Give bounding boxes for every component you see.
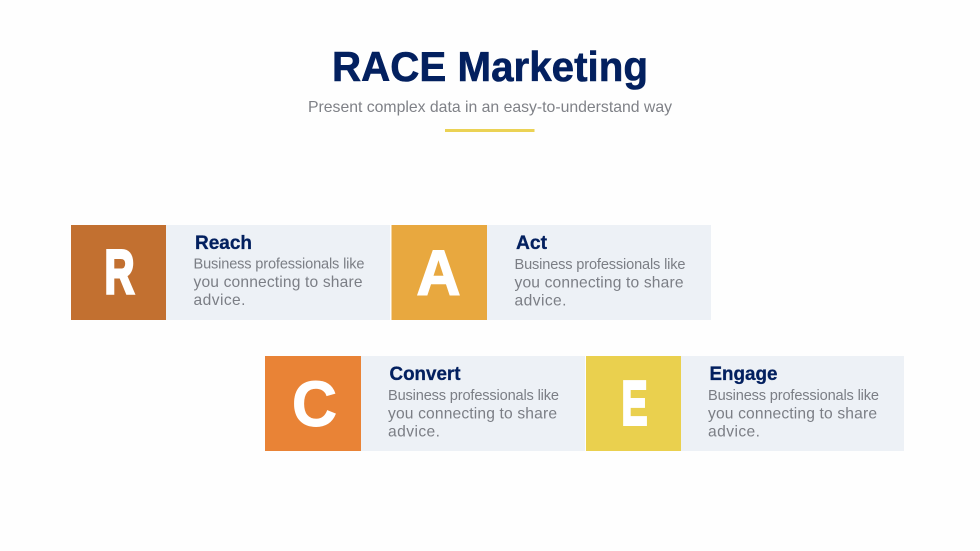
icon: letter R tile: R [104, 238, 134, 308]
text: Engage description: advice. [708, 424, 760, 440]
heading: Engage: Engage [710, 364, 778, 385]
accent underline [445, 129, 534, 132]
icon: letter A tile: A [416, 237, 460, 309]
icon: letter A tile [392, 225, 487, 320]
icon: letter R tile [71, 225, 166, 320]
subtitle: Present complex data in an easy-to-understand way [308, 99, 672, 116]
icon: letter E tile [586, 356, 681, 451]
icon: letter C tile [265, 356, 361, 451]
text: Reach description: Business professionals like [194, 256, 364, 272]
text: Engage description: you connecting to share [708, 406, 877, 422]
text: Convert description: Business professionals like [388, 388, 559, 404]
text: Act description: Business professionals like [514, 257, 686, 273]
text: Reach description: you connecting to share [194, 274, 362, 291]
text: Engage description: Business professionals like [708, 388, 879, 404]
text: Act description: you connecting to share [514, 274, 684, 292]
panel: Engage [586, 356, 904, 451]
panel: Convert [265, 356, 585, 451]
title: RACE Marketing [332, 43, 648, 90]
heading: Reach: Reach [195, 233, 252, 254]
text: Convert description: advice. [388, 424, 440, 440]
text: Act description [514, 257, 686, 310]
text: Convert description [388, 388, 559, 440]
text: Reach description: advice. [194, 292, 246, 309]
heading: Convert: Convert [390, 364, 461, 385]
heading: Act: Act [516, 233, 548, 254]
panel: Act [392, 225, 711, 320]
text: Convert description: you connecting to share [388, 406, 557, 422]
panel: Reach [71, 225, 390, 320]
text: Reach description [194, 256, 364, 309]
text: Act description: advice. [514, 292, 566, 310]
icon: letter C tile: C [292, 368, 337, 440]
text: Engage description [708, 388, 879, 440]
icon: letter E tile: E [622, 370, 648, 438]
